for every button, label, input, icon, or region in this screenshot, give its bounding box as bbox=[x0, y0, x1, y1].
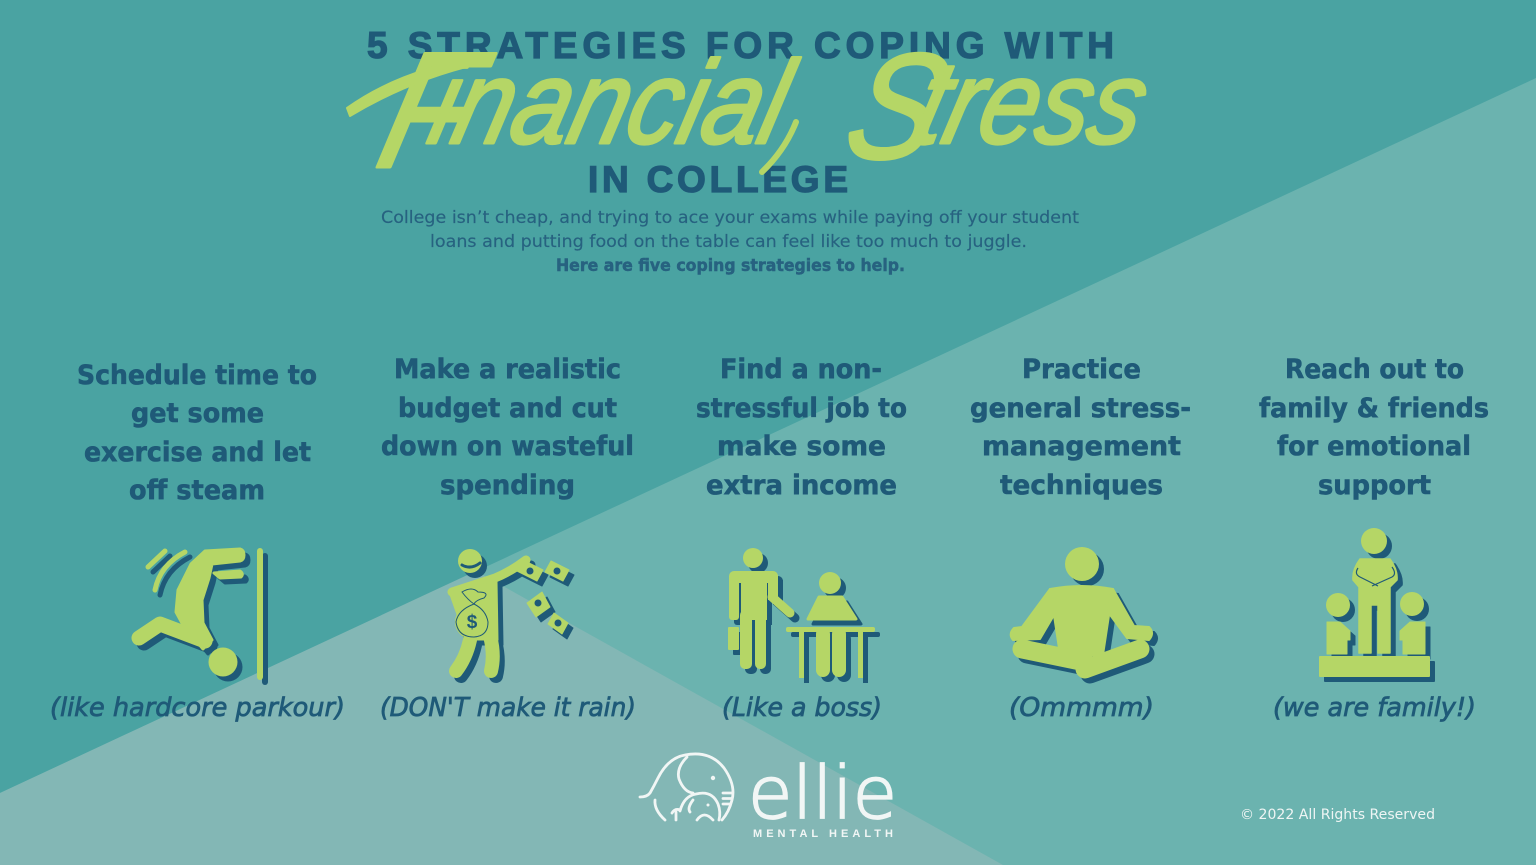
captions: (DON'T make it rain) bbox=[380, 693, 636, 723]
heading: job: Find a non- bbox=[720, 354, 882, 385]
heading: job: stressful job to bbox=[696, 393, 907, 424]
heading: budget: down on wasteful bbox=[381, 431, 634, 462]
heading: budget bbox=[381, 354, 634, 501]
title: script: S bbox=[832, 23, 962, 190]
heading: exercise: off steam bbox=[129, 475, 265, 506]
intro text: Here are five coping strategies to help. bbox=[556, 256, 905, 276]
heading: family: Reach out to bbox=[1285, 354, 1464, 385]
heading: stress management: general stress- bbox=[970, 393, 1191, 424]
title: script bbox=[347, 18, 1165, 202]
heading: stress management bbox=[970, 354, 1191, 501]
heading: job bbox=[696, 354, 907, 501]
heading: budget: spending bbox=[440, 470, 575, 501]
heading: job: make some bbox=[717, 431, 886, 462]
icon: parkour figure bbox=[139, 549, 265, 682]
title: script: F bbox=[364, 18, 505, 202]
captions bbox=[50, 693, 1476, 723]
heading: family bbox=[1259, 354, 1489, 501]
copyright: © 2022 All Rights Reserved bbox=[1240, 807, 1435, 823]
title: script: inancial bbox=[419, 37, 806, 168]
heading: family: for emotional bbox=[1277, 431, 1471, 462]
heading: exercise: get some bbox=[131, 398, 264, 429]
intro text: College isn’t cheap, and trying to ace your exams while paying off your student bbox=[381, 208, 1079, 228]
heading: exercise: Schedule time to bbox=[77, 360, 317, 391]
title: top line: 5 STRATEGIES FOR COPING WITH bbox=[367, 25, 1114, 66]
heading: job: extra income bbox=[706, 470, 897, 501]
captions: (Like a boss) bbox=[722, 693, 882, 723]
captions: (we are family!) bbox=[1273, 693, 1476, 723]
icon: person throwing money bbox=[449, 549, 574, 676]
heading: budget: Make a realistic bbox=[394, 354, 621, 385]
icon: person throwing money: $ bbox=[467, 612, 478, 633]
icon: boss and employee bbox=[728, 548, 880, 683]
title: script: tress bbox=[904, 37, 1161, 168]
intro text: loans and putting food on the table can feel like too much to juggle. bbox=[430, 232, 1027, 252]
heading: exercise: exercise and let bbox=[84, 437, 311, 468]
tagline: MENTAL HEALTH bbox=[753, 828, 893, 840]
heading: stress management: management bbox=[982, 431, 1181, 462]
icon: elephant bbox=[640, 754, 733, 820]
icon: family bbox=[1319, 528, 1435, 682]
heading: family: family & friends bbox=[1259, 393, 1489, 424]
icon: meditating person bbox=[1011, 547, 1157, 674]
heading: stress management: techniques bbox=[1000, 470, 1163, 501]
captions: (like hardcore parkour) bbox=[50, 693, 345, 723]
captions: (Ommmm) bbox=[1009, 693, 1154, 723]
intro text bbox=[381, 208, 1079, 276]
lighter bottom panel bbox=[0, 571, 1003, 865]
heading: exercise bbox=[77, 360, 317, 506]
title: bottom line: IN COLLEGE bbox=[588, 159, 848, 200]
wordmark: ellie bbox=[748, 751, 897, 835]
heading: family: support bbox=[1318, 470, 1431, 501]
logo: ellie mental health bbox=[640, 751, 897, 840]
heading: budget: budget and cut bbox=[398, 393, 617, 424]
heading: stress management: Practice bbox=[1022, 354, 1141, 385]
